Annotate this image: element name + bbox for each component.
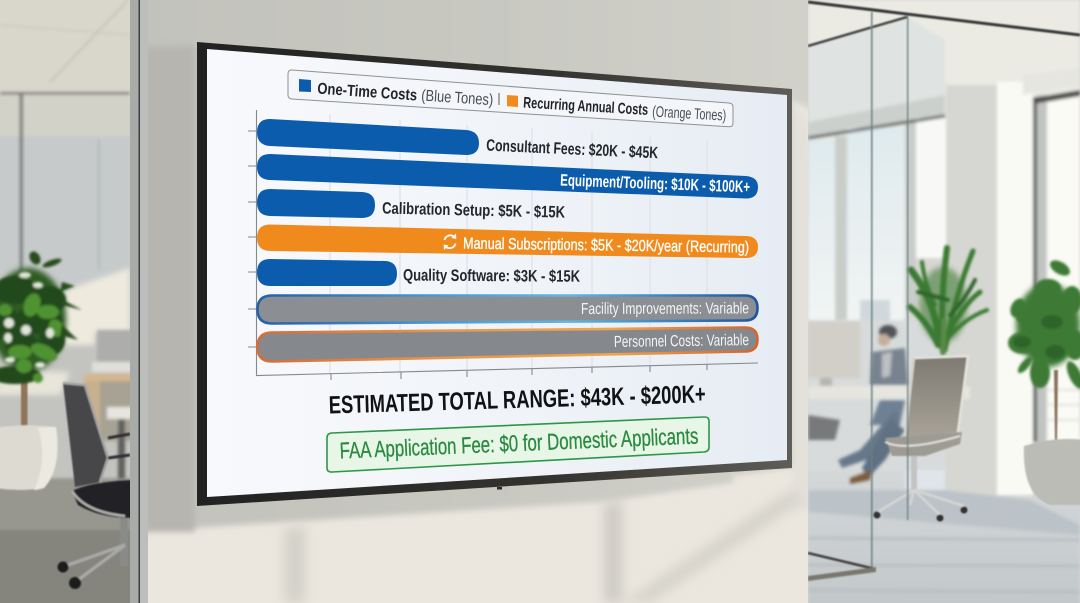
legend box [288,70,733,127]
callout: FAA application fee: FAA Application Fee: $0 for Domestic Applicants [339,422,699,463]
icon: potted plant left [0,249,82,490]
estimated total range: ESTIMATED TOTAL RANGE: $43K - $200K+ [328,380,706,419]
bar: personnel costs [258,328,758,362]
legend swatch: recurring [507,95,518,107]
glass door frames [808,2,1080,581]
bar: quality software: Quality Software: $3K - $15K [403,267,580,286]
bar: equipment/tooling: Equipment/Tooling: $10K - $100K+ [560,172,750,196]
bar: quality software [257,259,580,286]
chart grid lines [330,115,707,373]
icon: refresh [444,234,456,250]
icon: person at desk [808,322,970,484]
icon: potted plant right [1007,257,1080,505]
icon: palm plant [910,248,987,353]
bar: calibration setup: Calibration Setup: $5K - $15K [382,200,565,222]
legend label: one-time: One-Time Costs [317,81,418,104]
bar: consultant fees [257,119,659,162]
callout: FAA application fee [327,417,709,472]
legend note: blue tones: (Blue Tones) [421,88,494,109]
legend [288,70,733,127]
icon: office chair right [874,356,968,522]
legend separator [498,93,500,105]
glass frame strip [130,0,148,603]
right office background [808,0,1080,603]
monitor mount [497,487,502,490]
bar: consultant fees: Consultant Fees: $20K - $45K [486,137,659,162]
icon: office chair left [58,383,132,589]
bar: manual subscriptions [257,224,758,258]
bar: calibration setup [257,189,565,222]
bar: facility improvements [258,296,758,324]
legend label: recurring: Recurring Annual Costs [523,95,649,119]
wall [130,0,830,603]
left office background [0,0,135,603]
wall display monitor [197,42,792,506]
bar: facility improvements: Facility Improvements: Variable [581,300,749,318]
bar: personnel costs: Personnel Costs: Variable [614,332,749,351]
legend swatch: one-time [299,79,311,92]
bar: manual subscriptions: Manual Subscriptions: $5K - $20K/year (Recurring) [463,236,749,256]
screen [207,49,787,497]
bar: equipment/tooling [257,154,758,198]
chart axes [248,110,758,380]
legend note: orange tones: (Orange Tones) [652,104,727,125]
monitor frame [197,42,792,506]
